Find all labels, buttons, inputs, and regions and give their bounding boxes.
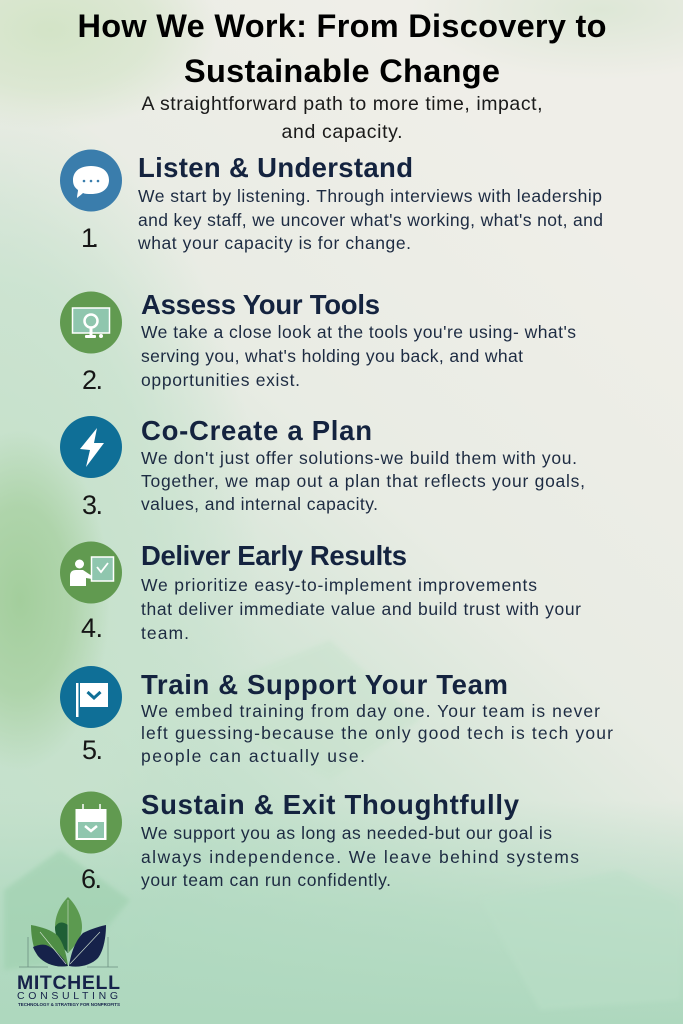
- title: How We Work: From Discovery to: [78, 8, 606, 44]
- icon: calendar: [60, 792, 122, 854]
- step number 5: 5.: [82, 735, 103, 765]
- heading: Co-Create a Plan: [141, 415, 372, 446]
- step number 2: 2.: [82, 365, 103, 395]
- heading: Train & Support Your Team: [141, 669, 508, 700]
- body text: people can actually use.: [141, 746, 365, 766]
- body text: what your capacity is for change.: [137, 233, 411, 253]
- step number 4: 4.: [81, 613, 103, 643]
- body text: Together, we map out a plan that reflects your goals,: [141, 471, 585, 491]
- icon: presenter at board: [60, 542, 122, 604]
- body text: your team can run confidently.: [141, 870, 391, 890]
- body text: We prioritize easy-to-implement improvements: [141, 575, 537, 595]
- icon: speech bubble: [60, 150, 122, 212]
- step 6: sustain and exit thoughtfully: [60, 789, 579, 894]
- step number 6: 6.: [81, 864, 102, 894]
- step 4: deliver early results: [60, 540, 581, 643]
- body text: [141, 575, 581, 643]
- step 1: listen and understand: [60, 150, 603, 253]
- logo text: CONSULTING: [17, 990, 118, 1002]
- heading: Sustain & Exit Thoughtfully: [141, 789, 520, 820]
- icon: three leaves: [19, 897, 118, 967]
- body text: [141, 322, 576, 390]
- title: [78, 8, 606, 89]
- subtitle: and capacity.: [282, 121, 402, 143]
- body text: We take a close look at the tools you're using- what's: [141, 322, 576, 342]
- subtitle: A straightforward path to more time, impact,: [142, 93, 542, 115]
- body text: [141, 701, 613, 766]
- logo text: TECHNOLOGY & STRATEGY FOR NONPROFITS: [18, 1002, 120, 1007]
- body text: that deliver immediate value and build trust with your: [141, 599, 581, 619]
- body text: We embed training from day one. Your team is never: [141, 701, 600, 721]
- icon: monitor: [60, 292, 122, 354]
- title: Sustainable Change: [184, 53, 500, 89]
- body text: [141, 448, 585, 514]
- logo text: [17, 972, 120, 1007]
- body text: We don't just offer solutions-we build them with you.: [141, 448, 577, 468]
- body text: [137, 186, 603, 253]
- logo: Mitchell Consulting: [17, 897, 120, 1007]
- body text: values, and internal capacity.: [141, 494, 378, 514]
- body text: always independence. We leave behind systems: [141, 847, 579, 867]
- body text: and key staff, we uncover what's working, what's not, and: [138, 210, 603, 230]
- step 5: train and support your team: [60, 666, 613, 766]
- step number 1: 1.: [81, 223, 99, 253]
- body text: We support you as long as needed-but our goal is: [141, 823, 552, 843]
- body text: [141, 823, 579, 890]
- step 3: co-create a plan: [60, 415, 585, 520]
- body text: opportunities exist.: [141, 370, 300, 390]
- body text: We start by listening. Through interviews with leadership: [138, 186, 602, 206]
- subtitle: [142, 93, 542, 143]
- heading: Deliver Early Results: [141, 540, 407, 571]
- heading: Listen & Understand: [138, 152, 413, 183]
- step number 3: 3.: [82, 490, 103, 520]
- body text: left guessing-because the only good tech is tech your: [141, 723, 613, 743]
- icon: lightning bolt: [60, 416, 122, 478]
- body text: team.: [141, 623, 189, 643]
- step 2: assess your tools: [60, 289, 576, 395]
- heading: Assess Your Tools: [141, 289, 380, 320]
- logo text: MITCHELL: [17, 972, 120, 994]
- body text: serving you, what's holding you back, and what: [141, 346, 523, 366]
- icon: flag: [60, 666, 122, 728]
